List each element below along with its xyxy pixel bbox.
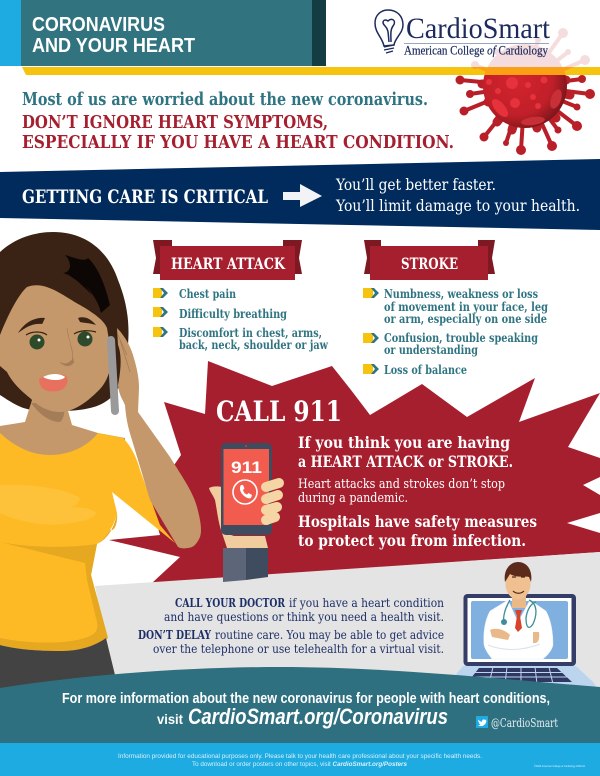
doctor coat xyxy=(484,600,553,659)
band: getting care is critical xyxy=(0,159,600,230)
phone body xyxy=(221,443,272,535)
intro text: Most of us are worried about the new coronavirus. xyxy=(22,89,428,110)
icon: twitter xyxy=(476,716,488,728)
stroke symptoms list: Confusion, trouble speaking xyxy=(384,330,538,345)
benefits text xyxy=(335,175,580,215)
laptop with doctor xyxy=(445,562,598,692)
warning headline: ESPECIALLY IF YOU HAVE A HEART CONDITION. xyxy=(22,132,454,153)
warning headline xyxy=(22,112,454,153)
shirt highlight xyxy=(0,485,96,525)
doctor arms xyxy=(490,629,539,643)
benefits text: You’ll get better faster. xyxy=(335,175,496,194)
tie xyxy=(515,610,522,632)
icon: handset in circle xyxy=(233,480,257,504)
laptop screen xyxy=(464,594,576,666)
doctor head xyxy=(506,568,530,600)
call your doctor text: if you have a heart condition xyxy=(289,595,444,610)
call your doctor text: routine care. You may be able to get advice xyxy=(215,627,444,642)
call 911 message: to protect you from infection. xyxy=(298,531,526,550)
call your doctor text: over the telephone or use telehealth for a virtual visit. xyxy=(153,641,444,656)
call 911 message: during a pandemic. xyxy=(298,491,408,506)
ribbon: heart attack: HEART ATTACK xyxy=(171,254,286,273)
bullet xyxy=(153,327,162,337)
icon: light bulb with heart xyxy=(375,10,403,53)
shirt shadow xyxy=(0,513,117,651)
call 911 message: If you think you are having xyxy=(298,433,510,452)
bullet xyxy=(363,333,373,343)
eyebrows xyxy=(18,317,96,333)
doctor smile xyxy=(512,577,525,593)
arrow xyxy=(283,184,322,207)
bottom cyan bar xyxy=(0,743,600,776)
fingers xyxy=(266,483,279,520)
eyes xyxy=(26,331,96,350)
heart attack symptoms list: Difficulty breathing xyxy=(179,306,287,321)
phone xyxy=(111,340,115,411)
title: CORONAVIRUS xyxy=(32,14,165,36)
nose xyxy=(60,328,74,366)
call 911 message: Heart attacks and strokes don’t stop xyxy=(298,477,505,492)
stroke symptoms list: Loss of balance xyxy=(384,362,467,377)
disclaimer: Information provided for educational purposes only. Please talk to your health care professional about your specific health needs. xyxy=(118,753,482,760)
call your doctor text xyxy=(138,595,444,656)
bullet xyxy=(363,364,373,374)
heart attack symptoms list: back, neck, shoulder or jaw xyxy=(179,337,329,352)
keyboard xyxy=(468,668,572,682)
logo: CardioSmart xyxy=(375,10,551,58)
title: AND YOUR HEART xyxy=(32,35,195,57)
stroke symptoms list: of movement in your face, leg xyxy=(384,299,548,314)
warning headline: DON’T IGNORE HEART SYMPTOMS, xyxy=(22,112,328,133)
disclaimer: To download or order posters on other topics, visit CardioSmart.org/Posters xyxy=(192,761,407,768)
logo: CardioSmart: American College of Cardiology xyxy=(404,44,549,58)
phone screen xyxy=(224,449,269,525)
disclaimer: ©2020 American College of Cardiology 2020-01 xyxy=(534,764,585,768)
hair back xyxy=(0,232,129,411)
pants xyxy=(0,638,115,692)
doctor neck xyxy=(512,592,526,608)
virus on stripe xyxy=(472,67,574,75)
doctor hair xyxy=(505,562,531,582)
call 911 burst xyxy=(109,361,600,583)
bullet xyxy=(153,307,162,317)
stethoscope xyxy=(504,600,536,627)
call 911 message: Hospitals have safety measures xyxy=(298,512,537,531)
laptop base xyxy=(445,666,598,692)
disclaimer xyxy=(118,753,585,768)
mouth xyxy=(39,374,67,392)
call 911 message xyxy=(298,433,537,550)
neck and chest xyxy=(0,400,125,460)
bullet xyxy=(363,288,373,298)
ribbon: stroke xyxy=(364,240,495,280)
stroke symptoms list: or understanding xyxy=(384,342,478,357)
hair highlight xyxy=(63,255,110,313)
intro text xyxy=(22,89,454,153)
header banner xyxy=(0,0,326,66)
bullet xyxy=(153,288,162,298)
shirt xyxy=(0,433,175,651)
twitter handle xyxy=(476,716,558,730)
heart attack symptoms list: Discomfort in chest, arms, xyxy=(179,325,322,340)
call 911 message: a HEART ATTACK or STROKE. xyxy=(298,452,513,471)
heart attack symptoms list: Chest pain xyxy=(179,286,236,301)
twitter handle: @CardioSmart xyxy=(491,716,558,730)
face xyxy=(0,285,112,412)
band: getting care is critical: GETTING CARE IS CRITICAL xyxy=(22,186,268,208)
icon: hand holding phone: 911 xyxy=(231,459,262,477)
stroke symptoms list xyxy=(363,286,548,377)
virus faded upper part xyxy=(471,28,590,67)
stroke symptoms list: Numbness, weakness or loss xyxy=(384,286,538,301)
hand xyxy=(209,486,268,548)
stroke symptoms list: or arm, especially on one side xyxy=(384,311,547,326)
title xyxy=(32,14,195,57)
footer text xyxy=(62,691,550,729)
call your doctor text: DON’T DELAY xyxy=(138,627,212,642)
ribbon: stroke: STROKE xyxy=(401,254,458,273)
gray panel xyxy=(95,552,600,700)
call 911 heading: CALL 911 xyxy=(216,395,342,428)
sleeve xyxy=(223,548,246,582)
call your doctor text: CALL YOUR DOCTOR xyxy=(175,595,285,610)
footer teal band xyxy=(0,667,600,743)
yellow stripe xyxy=(22,67,600,75)
logo: CardioSmart: CardioSmart xyxy=(406,12,551,45)
website link: CardioSmart.org/Coronavirus xyxy=(188,704,448,729)
icon: hand holding phone xyxy=(209,443,279,582)
footer text: visit xyxy=(157,711,183,727)
woman on the phone xyxy=(0,232,201,692)
heart attack symptoms list xyxy=(153,286,329,352)
ribbon: heart attack xyxy=(153,240,302,280)
virus illustration xyxy=(456,75,595,155)
arm and hand xyxy=(117,328,201,548)
call your doctor text: and have questions or think you need a health visit. xyxy=(164,609,444,624)
